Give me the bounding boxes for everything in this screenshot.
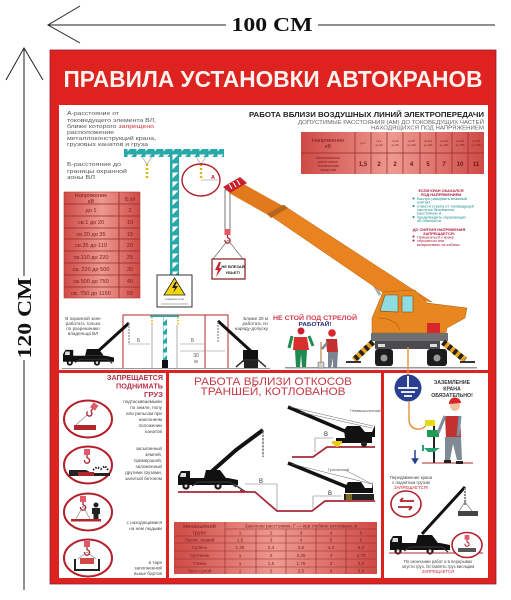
crane hook with warning sign: УБЬЕТ! [226, 270, 240, 275]
icon: load down circle [452, 532, 482, 558]
text: container note: выше бортов [134, 571, 163, 576]
table: protection zone distances: св.1 до 20 [78, 220, 104, 226]
heading: grounding mandatory [431, 380, 473, 399]
table: soil distances: 2 [270, 530, 273, 536]
text: moving with load forbidden [390, 475, 433, 490]
table: soil distances: 3,5 [358, 568, 365, 574]
text: load dragged: наклонном [139, 417, 162, 422]
table: soil distances: 3 [330, 561, 333, 566]
table: soil distances: 4,4 [328, 545, 335, 550]
table: protection zone distances: св.20 до 35 [76, 232, 106, 238]
text: within 30 m note: Ближе 30 м [243, 316, 268, 321]
text: within 30 m note: работать по [242, 321, 268, 326]
table: soil distances: 6 [360, 538, 363, 542]
dimension: height 120 CM: 120 CM [15, 278, 36, 358]
table: soil distances: 1 [239, 561, 242, 566]
terrain: embankment [292, 447, 375, 457]
text: lower the load at breaks: ЗАПРЕЩАЕТСЯ [422, 569, 454, 574]
dimension: lower B [313, 491, 342, 508]
text: container note: заполненной [134, 564, 162, 570]
text: buried load note: землей, [145, 451, 162, 457]
grounding cable [407, 347, 409, 375]
table: soil distances: 3,5 [358, 561, 365, 566]
table: minimum distances by voltage: Минимальное [316, 156, 340, 160]
text: buried load note: другими грузами, [125, 470, 162, 475]
table: soil distances: 5 [360, 530, 363, 536]
text: if crane is energized: Прикасаться к крану [417, 234, 454, 240]
text: distance A definition [67, 111, 157, 148]
table: minimum distances by voltage: 7 [442, 162, 446, 168]
table: minimum distances by voltage: до 220 [424, 143, 433, 147]
table: soil distances: 1 [239, 568, 242, 574]
orange crane [223, 177, 477, 368]
table: minimum distances by voltage: Напряжение [312, 138, 344, 144]
table: minimum distances by voltage: св.1 [376, 139, 382, 143]
table: soil distances: 3,5 [298, 545, 305, 550]
danger zone circle A: А [211, 175, 215, 181]
table: soil distances: 1,25 [236, 545, 245, 550]
table: soil distances: 3 [330, 568, 333, 574]
crane hook with warning sign: НЕ ВЛЕЗАЙ [221, 264, 245, 269]
warning sign [157, 275, 192, 307]
table: minimum distances by voltage: 11 [473, 162, 480, 168]
table: minimum distances by voltage: 4 [410, 162, 414, 168]
text: protection zone note [65, 315, 101, 336]
crane: left small [63, 323, 129, 366]
heading: slopes and trenches: РАБОТА ВБЛИЗИ ОТКОСОВ [194, 376, 352, 388]
heading: forbidden to lift: ПОДНИМАТЬ [116, 384, 163, 390]
diagram: working zones under power line [62, 315, 270, 368]
text: buried load note [125, 445, 162, 481]
heading: grounding mandatory: КРАНА [443, 386, 461, 392]
table: soil distances: 1,5 [237, 538, 244, 542]
text: buried load note: заложенный [136, 463, 162, 469]
table: minimum distances by voltage: св.35 [408, 139, 415, 143]
text: moving with load forbidden: ЗАПРЕЩАЕТСЯ! [394, 485, 428, 490]
text: container note [134, 560, 163, 576]
text: if crane is energized: об опасности [417, 218, 441, 223]
icon: no moving arrows [391, 491, 421, 517]
table: soil distances: 1 [239, 530, 242, 536]
table: protection zone distances [64, 192, 140, 298]
table: soil distances: 2 [270, 553, 273, 558]
table: soil distances: 3 [300, 530, 303, 536]
text: load dragged: положении [139, 423, 162, 428]
table: protection zone distances: св.35 до 110 [75, 243, 107, 249]
text: if crane is energized: ДО СНЯТИЯ НАПРЯЖЕНИЯ [413, 227, 465, 232]
text: load dragged: или рельсам при [126, 411, 162, 416]
table: protection zone distances: 55 [127, 291, 133, 297]
warning: do not stand under boom [273, 313, 357, 328]
grounding rod and cable [409, 402, 473, 463]
title: ПРАВИЛА УСТАНОВКИ АВТОКРАНОВ [64, 66, 482, 92]
crane: pneumatic wheels [288, 407, 381, 447]
table: protection zone distances: 40 [127, 279, 133, 285]
table: soil distances: грунт [193, 530, 207, 536]
diagram: working zones under power line: Б [191, 338, 195, 344]
table: protection zone distances: 30 [127, 267, 133, 273]
text: distance A definition: ближе которого запрещено [67, 124, 154, 130]
text: buried load note: залитый бетоном [125, 475, 162, 481]
text: protection zone note: В охранной зоне [65, 315, 101, 321]
table: minimum distances by voltage: кВ [325, 144, 331, 150]
table: soil distances: Супесь [192, 545, 208, 550]
dimension: width 100 CM: 100 CM [232, 15, 312, 36]
text: load dragged [123, 399, 163, 434]
text: if crane is energized: ЗАПРЕЩАЕТСЯ: [423, 231, 455, 236]
dimension: lower B: В [328, 491, 332, 497]
table: minimum distances by voltage: 1,5 [359, 162, 368, 168]
table: soil distances: 3,25 [297, 553, 306, 558]
heading: grounding mandatory: ЗАЗЕМЛЕНИЕ [434, 380, 471, 386]
text: moving with load forbidden: Передвижение крана [390, 475, 433, 480]
crane: pneumatic wheels: Пневмоколесный [350, 409, 381, 413]
table: soil distances: 5,3 [358, 545, 365, 550]
table: soil distances: 1 [239, 553, 242, 558]
crane: center truck [178, 430, 263, 492]
text: distance A definition: токоведущего элемента ВЛ, [67, 118, 157, 124]
table: minimum distances by voltage: св.110 [424, 139, 433, 143]
heading: overhead power lines: РАБОТА ВБЛИЗИ ВОЗДУШНЫХ ЛИНИЙ ЭЛЕКТРОПЕРЕДАЧИ [249, 110, 484, 119]
table: minimum distances by voltage: до 1150 [471, 143, 481, 147]
text: if crane is energized: ЕСЛИ КРАН ОКАЗАЛСЯ [418, 188, 464, 193]
table: soil distances: Суглинок [190, 553, 210, 558]
crane: crawler [288, 463, 374, 500]
table: protection zone distances: кВ [88, 199, 94, 205]
table: protection zone distances: св. 750 до 1150 [71, 291, 111, 297]
diagram: working zones under power line: Б [137, 338, 141, 344]
table: minimum distances by voltage: св.220 [440, 139, 449, 143]
table: protection zone distances: до 1 [85, 208, 97, 214]
table: soil distances: 1,5 [268, 561, 275, 566]
dimension: width 100 CM [48, 6, 495, 43]
table: soil distances: Заколное расстояние, Г — при глубине котлована, м [245, 524, 357, 528]
table: minimum distances by voltage: расстояние [318, 160, 338, 164]
table: soil distances: 2,5 [298, 568, 305, 574]
heading: grounding mandatory: ОБЯЗАТЕЛЬНО! [431, 393, 473, 399]
warning: do not stand under boom: НЕ СТОЙ ПОД СТРЕЛОЙ [273, 313, 357, 322]
table: minimum distances by voltage: св.750 [472, 139, 481, 143]
crane: crawler: Гусеничный [328, 468, 349, 472]
text: if crane is energized: выпрыгивать из кабины [417, 242, 460, 247]
crane: load suspended [389, 487, 483, 555]
text: if crane is energized: части на безопасное [417, 207, 454, 212]
icon: blue down arrow [412, 450, 418, 463]
worker grounding [438, 397, 463, 464]
text: if crane is energized: Быстро разорвать влажный [417, 196, 467, 201]
table: protection zone distances: 2 [128, 208, 132, 214]
heading: slopes and trenches: ТРАНШЕЙ, КОТЛОВАНОВ [200, 385, 346, 398]
text: protection zone note: владельца ВЛ [68, 331, 98, 336]
table: soil distances: 4 [330, 530, 333, 536]
text: distance B definition [67, 162, 127, 181]
table: minimum distances by voltage: до 35 [391, 143, 399, 147]
panel: slopes and trenches [169, 373, 381, 578]
panel: forbidden loads [59, 373, 166, 578]
table: minimum distances by voltage: 2 [393, 162, 397, 168]
dimension: upper B [315, 432, 333, 452]
icon: load in container [64, 540, 112, 576]
text: distance A definition: А-расстояние от [67, 111, 120, 117]
icon: people on load [64, 494, 112, 530]
table: minimum distances by voltage [301, 132, 484, 174]
text: if crane is energized: спускаться или [417, 238, 444, 243]
table: protection zone distances: св. 220 до 500 [72, 267, 110, 273]
dimension: upper B: В [324, 432, 328, 438]
table: minimum distances by voltage: до 110 [407, 143, 416, 147]
dimension: center B: В [259, 479, 263, 485]
text: load dragged: подтаскиваемыми [123, 399, 162, 404]
text: people note: с находящимися [127, 520, 163, 525]
table: protection zone distances: 15 [127, 232, 133, 238]
table: soil distances: 4 [300, 538, 303, 542]
table: minimum distances by voltage: 5 [426, 162, 430, 168]
table: soil distances: 4,75 [357, 553, 366, 558]
text: if crane is energized: ПОД НАПРЯЖЕНИЕМ [421, 192, 461, 197]
table: protection zone distances: св.110 до 220 [73, 255, 109, 261]
heading: slopes and trenches [194, 376, 352, 398]
table: minimum distances by voltage: до 750 [456, 143, 465, 147]
table: soil distances: 1,75 [297, 561, 306, 566]
table: protection zone distances: 20 [127, 243, 133, 249]
crane: right small [218, 321, 266, 368]
warning sign: охранная зона [165, 297, 184, 301]
heading: overhead power lines [249, 110, 485, 132]
text: within 30 m note [235, 316, 269, 331]
table: soil distances: Ненасыпной [183, 523, 216, 530]
table: soil distances: Глина [193, 561, 206, 566]
icon: ground symbol [394, 374, 422, 402]
warning: do not stand under boom: РАБОТАЙ! [298, 320, 332, 328]
panel: power line work [59, 105, 488, 370]
table: soil distances [174, 522, 377, 574]
text: buried load note: засыпанный [136, 445, 162, 451]
table: minimum distances by voltage: средства [320, 168, 337, 172]
heading: forbidden to lift [107, 375, 164, 399]
text: lower the load at breaks: По окончании работ и в перерывах [404, 559, 473, 564]
diagram: working zones under power line: 30 [193, 353, 199, 359]
text: if crane is energized: расстояние А [417, 210, 442, 216]
text: protection zone note: работать только [66, 321, 101, 326]
panel: grounding [384, 373, 488, 578]
poster background panel [50, 50, 496, 584]
text: load dragged: по земле, полу [130, 405, 163, 410]
heading: overhead power lines: ДОПУСТИМЫЕ РАССТОЯНИЯ (АМ) ДО ТОКОВЕДУЩИХ ЧАСТЕЙ [298, 118, 484, 126]
table: minimum distances by voltage: 2 [377, 162, 381, 168]
table: soil distances: Песок, гравий [185, 536, 215, 542]
table: minimum distances by voltage: до 20 [375, 143, 383, 147]
text: people note [127, 520, 163, 531]
pylon tower [124, 149, 224, 275]
table: protection zone distances: св.500 до 750 [73, 279, 109, 285]
table: soil distances: 5 [330, 538, 333, 542]
text: distance A definition: расположение [67, 130, 114, 136]
text: within 30 m note: наряду-допуску [235, 326, 269, 331]
text: distance A definition: металлоконструкций крана, [67, 135, 157, 142]
text: if crane is energized: контакт [417, 200, 431, 204]
text: buried load note: примерзшей, [134, 457, 162, 463]
text: lower the load at breaks: опусти груз. Оставлять груз висящим [402, 564, 474, 569]
text: container note: в таре [149, 560, 162, 565]
table: protection zone distances: Б,М [125, 197, 135, 203]
text: distance B definition: Б-расстояние до [67, 162, 121, 168]
table: protection zone distances: 25 [127, 255, 133, 261]
table: soil distances: 3 [270, 538, 273, 542]
text: protection zone note: по разрешению [66, 326, 100, 331]
table: minimum distances by voltage: до 400 [440, 143, 449, 147]
text: moving with load forbidden: с поднятым грузом [392, 480, 430, 485]
text: distance A definition: грузовых канатов и груза [67, 142, 149, 148]
workers [289, 328, 338, 368]
table: minimum distances by voltage: св.20 [392, 139, 399, 143]
table: protection zone distances: Напряжение [75, 193, 107, 199]
icon: buried load [64, 446, 112, 484]
text: distance B definition: границы охранной [67, 168, 127, 175]
text: if crane is energized: предупредить окружающих [417, 214, 466, 220]
table: soil distances: 2 [270, 568, 273, 574]
icon: load tied at angle [64, 400, 112, 438]
dimension: center B [245, 479, 277, 510]
danger zone circle A [182, 164, 220, 196]
text: load dragged: канатов [145, 429, 163, 434]
table: minimum distances by voltage: 10 [457, 162, 464, 168]
terrain: trench [178, 492, 375, 511]
text: people note: на нем людьми [129, 526, 162, 531]
text: if crane is energized: отвести стрелу от токоведущей [417, 204, 474, 208]
dimension: height 120 CM [6, 48, 43, 590]
heading: forbidden to lift: ЗАПРЕЩАЕТСЯ [107, 375, 163, 382]
table: minimum distances by voltage: технические [317, 164, 339, 168]
table: soil distances: Лесс сухой [188, 568, 212, 574]
text: distance B definition: зоны ВЛ [67, 175, 95, 181]
table: minimum distances by voltage: до 1 [360, 141, 366, 145]
text: if crane is energized [412, 188, 474, 247]
text: lower the load at breaks [402, 559, 474, 574]
table: protection zone distances: 10 [127, 220, 133, 226]
table: minimum distances by voltage: св.400 [456, 139, 465, 143]
crane hook with warning sign [212, 190, 245, 279]
table: soil distances: 2,4 [268, 545, 275, 550]
diagram: working zones under power line: м [194, 359, 198, 365]
heading: forbidden to lift: ГРУЗ [144, 392, 164, 399]
heading: overhead power lines: НАХОДЯЩИХСЯ ПОД НАПРЯЖЕНИЕМ [371, 126, 485, 132]
table: soil distances: 4 [330, 553, 333, 558]
